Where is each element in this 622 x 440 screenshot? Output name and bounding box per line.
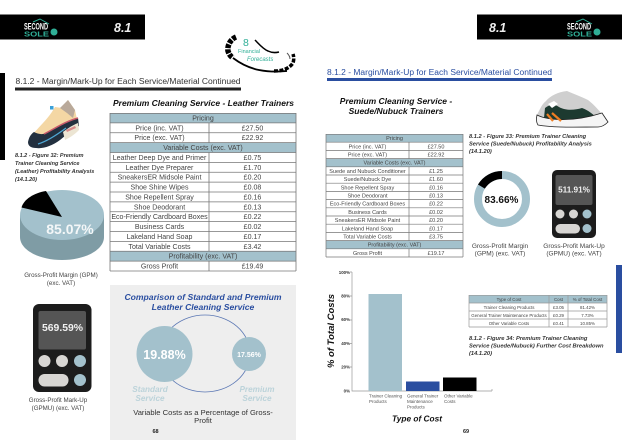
header band left [0,14,145,40]
y axis labels: 0% [344,388,350,394]
comparison caption [133,408,273,425]
comparison title [124,292,282,312]
pie value: 85.07% [46,221,94,237]
premium circle [232,337,266,371]
side tab left [0,73,5,160]
table: leather service pricing: £0.13 [244,204,261,211]
table: leather service pricing: £27.50 [242,125,263,132]
table: leather service pricing: £1.70 [244,165,261,172]
table: suede service pricing: Eco-Friendly Cardboard Boxes [330,202,405,208]
standard circle: 19.88% [143,348,186,362]
table: cost breakdown: Type of Cost [497,297,522,302]
x axis labels: Products [407,404,426,410]
table: cost breakdown: 7.73% [581,313,594,318]
x axis labels: General Trainer [407,394,439,398]
figure 34 caption: (14.1.20) [469,351,492,357]
table: leather service pricing: Business Cards [135,224,185,231]
table: leather service pricing: Shoe Repellent Spray [125,194,194,201]
table: cost breakdown: 81.42% [580,305,595,310]
standard circle [136,326,192,382]
y axis labels [339,270,350,394]
table: suede service pricing: £22.92 [428,152,444,158]
table: leather service pricing: £0.17 [244,234,261,241]
comparison caption: Profit [194,416,213,425]
table: suede service pricing: £1.25 [429,169,443,175]
table: leather service pricing: Variable Costs (exc. VAT) [163,145,243,152]
table: leather service pricing: £0.22 [244,214,261,221]
GPMU caption: (GPMU) (exc. VAT) [32,405,84,412]
page number 68: 68 [152,429,159,435]
table: suede service pricing: £19.17 [428,251,444,257]
premium label [239,385,275,403]
table: suede service pricing: Gross Profit [353,251,382,257]
table: suede service pricing: Shoe Deodorant [347,194,388,200]
table: cost breakdown: Trainer Cleaning Products [484,305,535,310]
header band right [477,14,622,40]
table: leather service pricing: Shoe Shine Wipes [131,184,189,192]
y axis labels: 20% [341,364,350,370]
table: suede service pricing: £0.13 [429,194,443,200]
table: suede service pricing: Profitability (exc. VAT) [368,243,421,249]
bars [368,294,476,391]
icon: calculator GPMU [33,304,92,392]
table: leather service pricing: £3.42 [244,244,261,251]
table: leather service pricing: £0.16 [244,194,261,201]
donut caption: Gross-Profit Margin [472,243,529,250]
table: suede service pricing: Business Cards [348,210,387,216]
x axis labels: Trainer Cleaning [369,394,403,398]
table: leather service pricing: Shoe Deodorant [134,204,185,211]
table: suede service pricing [326,134,463,257]
y axis labels: 80% [341,294,350,298]
y axis title: % of Total Costs [326,294,337,368]
table: leather service pricing: £0.08 [244,184,261,192]
figure 32 caption: 8.1.2 - Figure 32: Premium [15,153,84,159]
table: cost breakdown: General Trainer Maintenance Products [471,313,548,318]
donut caption [472,243,529,258]
table: leather service pricing: SneakersER Midsole Paint [118,175,201,182]
comparison caption: Variable Costs as a Percentage of Gross- [133,408,273,417]
table: suede service pricing: Pricing [386,136,403,142]
left page [0,14,296,440]
table: leather service pricing: Leather Deep Dye and Primer [113,155,207,162]
table: cost breakdown: % of Total Cost [573,297,603,302]
x axis title: Type of Cost [392,414,443,424]
table: suede service pricing: SneakersER Midsole Paint [335,218,401,224]
x axis labels: Maintenance [407,399,433,404]
ring connector [160,315,250,392]
figure 34 caption [469,336,604,357]
table: leather service pricing: £22.92 [242,135,263,142]
table: suede service pricing: Suede/Nubuck Dye [344,177,391,183]
table: suede service pricing: Price (inc. VAT) [349,144,387,150]
table: cost breakdown: £0.29 [553,313,565,318]
heading right: 8.1.2 - Margin/Mark-Up for Each Service/Material Continued [327,68,552,77]
table: cost breakdown: Cost [554,297,564,302]
table: leather service pricing: Profitability (exc. VAT) [169,254,237,261]
right page [326,14,622,435]
table: leather service pricing: Pricing [192,115,214,122]
GPMU caption right [543,243,605,258]
table title right [340,96,452,116]
figure 33 caption [469,134,592,155]
table: leather service pricing: Eco-Friendly Cardboard Boxes [111,214,208,221]
table: leather service pricing: £0.20 [244,175,261,182]
chapter number: 8 [243,37,249,49]
table: cost breakdown: Other Variable Costs [489,321,530,326]
table: leather service pricing [110,113,296,271]
table: leather service pricing: Price (inc. VAT) [135,125,184,132]
table title left: Premium Cleaning Service - Leather Trainers [113,99,294,108]
y axis labels: 40% [341,341,350,346]
side tab right [616,265,622,353]
table: suede service pricing: £0.22 [429,202,443,208]
y axis labels: 60% [341,317,350,322]
x axis labels: Other Variable [444,394,473,398]
figure 34 caption: 8.1.2 - Figure 34: Premium Trainer Cleaning [469,336,588,342]
GPM caption: (exc. VAT) [47,280,75,287]
standard label [132,385,169,403]
icon: calculator GPMU right [552,170,596,238]
premium circle: 17.56% [237,352,262,359]
logo right: SOLE [567,32,592,38]
table: cost breakdown: 10.85% [580,321,595,326]
figure 32 caption: (14.1.20) [15,177,37,183]
GPM caption [24,272,98,287]
standard label: Standard [132,385,169,394]
chapter name: Financial [238,49,260,55]
calculator value: 569.59% [42,323,83,334]
table: suede service pricing: Total Variable Costs [343,234,392,240]
figure 32 caption: Trainer Cleaning Service [15,161,79,167]
heading left [15,77,241,90]
chapter icon: footprint [228,37,294,72]
donut chart: gross-profit margin [478,175,526,223]
GPM caption: Gross-Profit Margin (GPM) [24,272,98,279]
premium label: Service [242,394,272,403]
panel: comparison [110,285,296,440]
table: suede service pricing: £3.75 [429,234,443,240]
heading right [327,68,552,81]
table: suede service pricing: £0.17 [429,226,443,232]
table: suede service pricing: £0.20 [429,218,443,224]
comparison title: Leather Cleaning Service [152,302,255,312]
logo right [567,19,600,38]
table: suede service pricing: Suede and Nubuck Conditioner [329,169,406,175]
standard label: Service [135,394,165,403]
figure 33 caption: Service (Suede/Nubuck) Profitability Analysis [469,142,592,148]
GPMU caption [29,397,88,412]
section number right: 8.1 [489,21,506,35]
table title right: Suede/Nubuck Trainers [349,106,444,116]
bar chart: cost breakdown [326,270,492,424]
chapter name [238,49,273,63]
table: leather service pricing: Total Variable Costs [128,244,191,251]
table: leather service pricing: Leather Dye Preparer [126,165,194,172]
figure 33 caption: (14.1.20) [469,149,492,155]
x axis labels [369,394,473,410]
donut caption: (GPM) (exc. VAT) [475,250,525,258]
table: leather service pricing: £0.02 [244,224,261,231]
table: suede service pricing: Variable Costs (exc. VAT) [363,161,426,167]
logo right: SECOND [567,22,591,32]
icon: multicolour trainer [28,100,79,148]
heading left: 8.1.2 - Margin/Mark-Up for Each Service/Material Continued [16,77,240,86]
section number left: 8.1 [114,21,131,35]
figure 33 caption: 8.1.2 - Figure 33: Premium Trainer Cleaning [469,134,587,140]
table: suede service pricing: Shoe Repellent Spray [341,185,394,191]
GPMU caption right: (GPMU) (exc. VAT) [546,250,602,258]
y axis labels: 100% [339,270,350,275]
comparison title: Comparison of Standard and Premium [124,292,282,302]
table: suede service pricing: Lakeland Hand Soap [342,226,393,232]
figure 34 caption: Service (Suede/Nubuck) Further Cost Breakdown [469,344,604,350]
table: cost breakdown: £3.05 [553,305,565,310]
premium label: Premium [239,385,275,394]
table: cost breakdown: £0.41 [553,321,565,326]
donut value: 83.66% [485,195,519,206]
table: suede service pricing: £27.50 [428,144,444,150]
table title right: Premium Cleaning Service - [340,96,452,106]
table: suede service pricing: £0.02 [429,210,443,216]
calculator value right: 511.91% [558,186,591,194]
table: suede service pricing: £0.16 [429,185,443,191]
page number 69: 69 [463,429,469,435]
x axis labels: Products [369,399,388,404]
table: suede service pricing: £1.60 [429,177,443,183]
chapter name: Forecasts [247,57,273,63]
x axis labels: Costs [444,399,456,404]
icon: grey trainer [536,91,608,127]
logo left: SOLE [24,32,49,38]
GPMU caption: Gross-Profit Mark-Up [29,397,88,404]
logo left [24,19,58,38]
table: leather service pricing: £19.49 [242,264,263,270]
figure 32 caption [15,153,94,183]
table: suede service pricing: Price (exc. VAT) [348,152,387,158]
table: leather service pricing: Price (exc. VAT) [134,135,185,142]
table: leather service pricing: £0.75 [244,155,261,162]
table: cost breakdown [469,295,607,327]
GPMU caption right: Gross-Profit Mark-Up [543,243,605,250]
table: leather service pricing: Lakeland Hand Soap [127,234,192,241]
pie chart: gross-profit margin [20,190,104,260]
figure 32 caption: (Leather) Profitability Analysis [15,169,94,175]
table: leather service pricing: Gross Profit [141,264,178,270]
logo left: SECOND [24,22,48,32]
